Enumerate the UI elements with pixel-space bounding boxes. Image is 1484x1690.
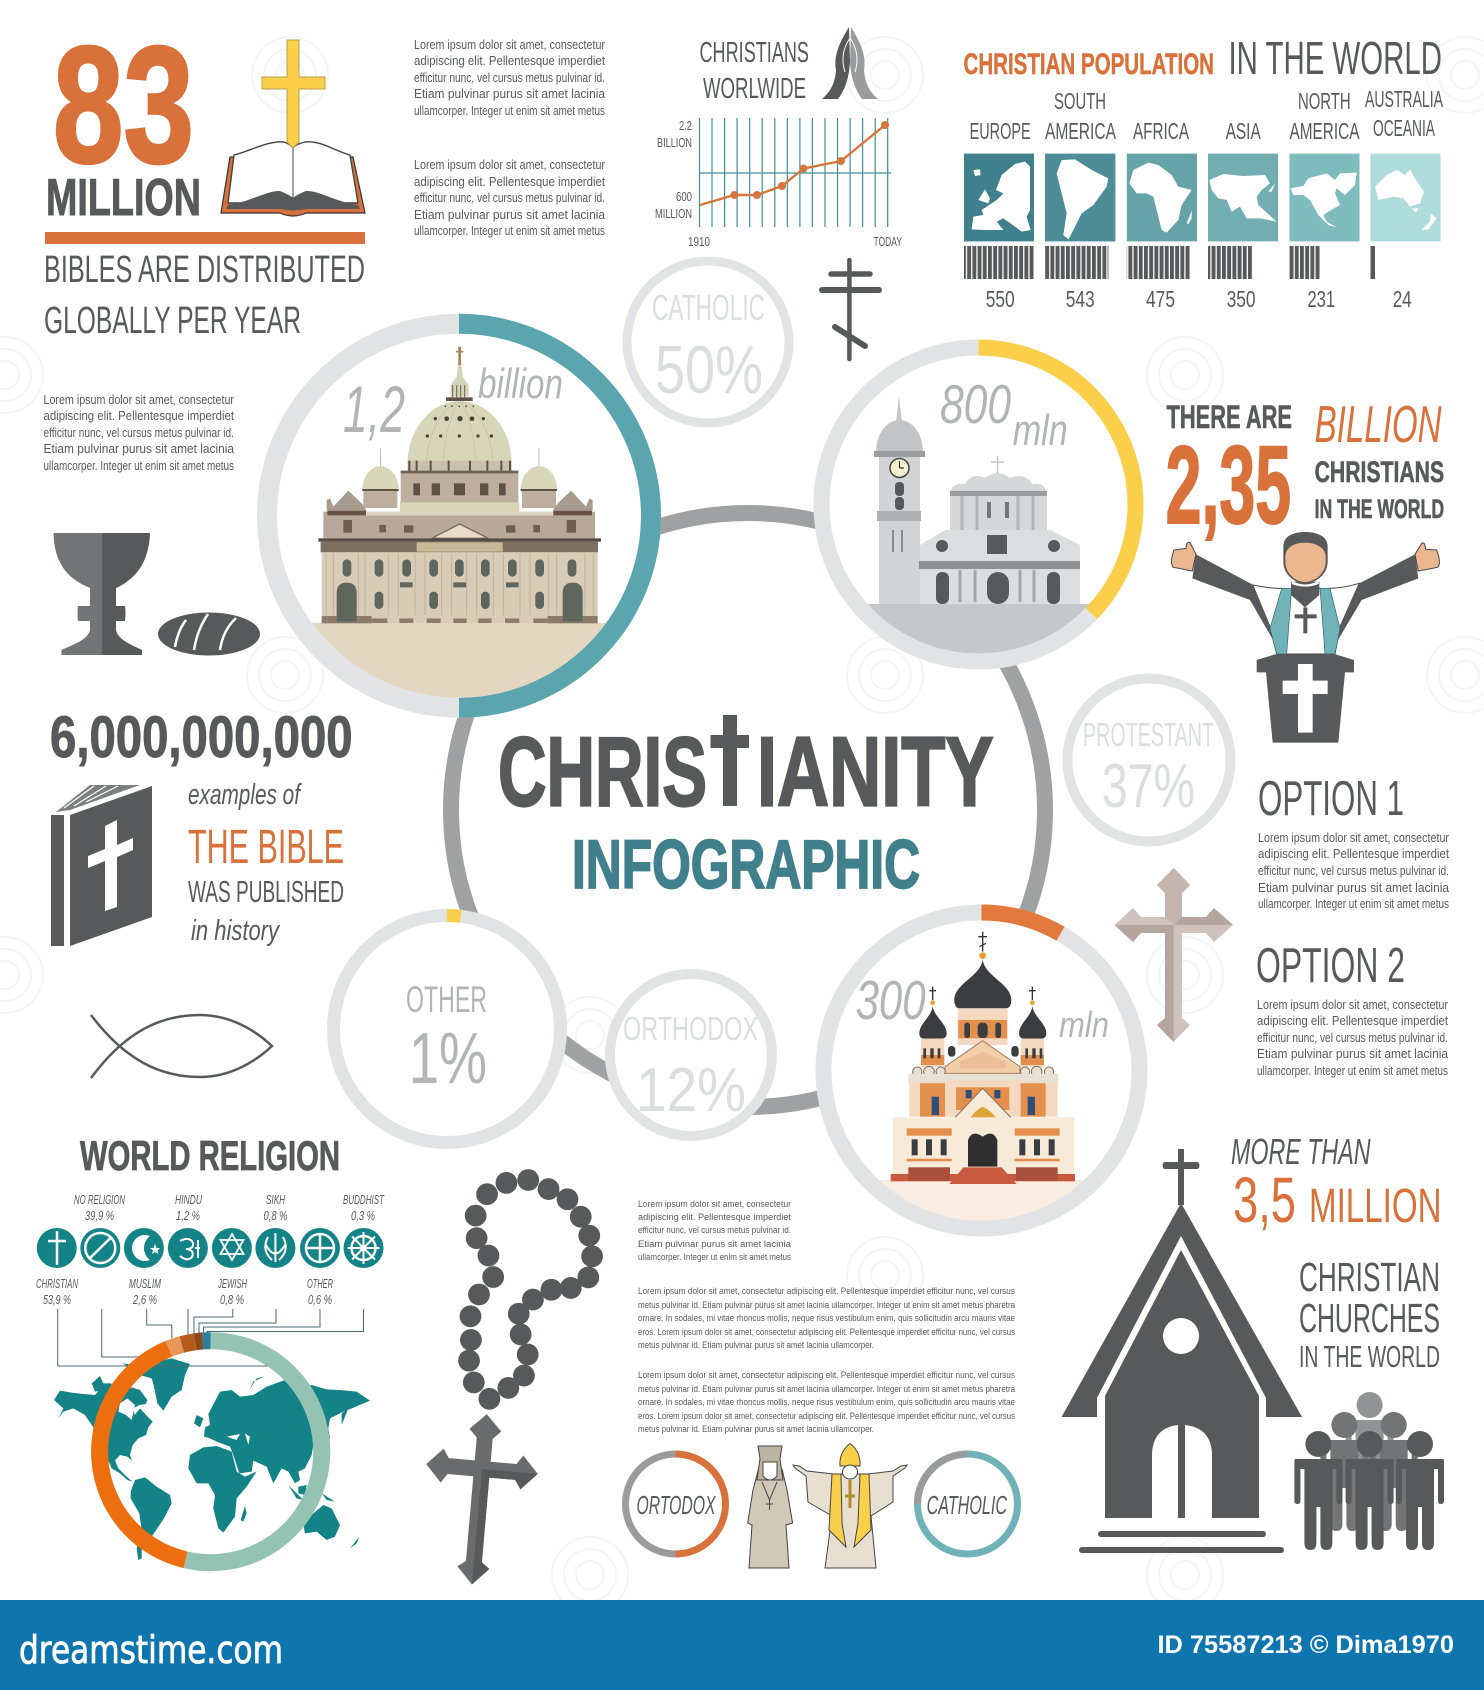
population values: 550 (986, 286, 1015, 312)
icon: orthodox cross (822, 260, 879, 359)
panel: protestant 37 percent: PROTESTANT (1083, 716, 1214, 753)
continent labels: AMERICA (1045, 118, 1116, 144)
heading: world religion: WORLD RELIGION (80, 1132, 340, 1179)
panel: catholic 50 percent: CATHOLIC (652, 287, 765, 328)
panel: catholic 50 percent: 50% (655, 332, 763, 408)
continent tiles (964, 154, 1034, 241)
icon: priest at pulpit (1171, 532, 1439, 743)
word MILLION: MILLION (46, 169, 201, 227)
axis labels: TODAY (874, 234, 902, 249)
text block: bottom wide 1: eros. Lorem ipsum dolor sit amet, consectetur adipiscing elit. Pellentesque imperdiet efficitur nunc, vel cursus (638, 1327, 1015, 1338)
icon: pope (793, 1444, 907, 1568)
panel: orthodox cathedral 300 mln (820, 912, 1140, 1240)
illustration: onion dome cathedral (891, 932, 1075, 1184)
panel: world religion chart (36, 1192, 385, 1563)
icon: orthodox priest (748, 1446, 793, 1568)
there are 2,35 billion christians (1166, 396, 1444, 547)
continent labels: ASIA (1226, 118, 1261, 144)
there are 2,35 billion christians: THERE ARE (1166, 399, 1292, 435)
continent labels: AMERICA (1290, 118, 1360, 144)
stole (1270, 588, 1292, 654)
text block: top 2: Lorem ipsum dolor sit amet, consectetur (414, 158, 605, 172)
text block: top 1: adipiscing elit. Pellentesque imperdiet (414, 54, 605, 68)
icon: church (1062, 1149, 1302, 1553)
icon: holy bible (51, 785, 152, 946)
progress arc (978, 348, 1136, 614)
head (1283, 532, 1328, 583)
population values: 475 (1146, 286, 1175, 312)
bottom labels: JEWISH (217, 1276, 247, 1291)
beads (458, 1169, 603, 1410)
panel: catholic basilica 1,2 billion: billion (478, 360, 563, 407)
text: examples of the bible: examples of (188, 779, 302, 811)
text block: bottom small: ullamcorper. Integer ut enim sit amet metus (638, 1252, 791, 1263)
text: examples of the bible (188, 779, 344, 947)
continent labels: AFRICA (1133, 118, 1189, 144)
option 1: Lorem ipsum dolor sit amet, consectetur (1258, 831, 1449, 845)
cross letter (710, 715, 749, 806)
bottom labels: CHRISTIAN (36, 1276, 78, 1291)
text block: bottom small: adipiscing elit. Pellentesque imperdiet (638, 1212, 791, 1223)
caption line 1: BIBLES ARE DISTRIBUTED (44, 249, 365, 291)
orange bar (45, 232, 365, 244)
chart grid (700, 118, 891, 227)
text block: bottom wide 2: ornare. In sodales, mi vitae rhoncus mollis, neque risus vestibulum enim, quis sollicitudin arcu mauris vitae (638, 1397, 1015, 1408)
option 2: adipiscing elit. Pellentesque imperdiet (1257, 1014, 1448, 1028)
axis labels: MILLION (655, 206, 692, 221)
ground (868, 604, 1089, 654)
option 1: adipiscing elit. Pellentesque imperdiet (1258, 847, 1449, 861)
option 1: OPTION 1 (1258, 772, 1404, 826)
population values: 24 (1393, 286, 1412, 312)
panel: orthodox 12 percent (610, 974, 772, 1136)
heading: christians worldwide: WORLWIDE (703, 73, 806, 105)
panel: christian population in the world (964, 32, 1443, 312)
panel: orthodox 12 percent: ORTHODOX (623, 1010, 758, 1047)
panel: other 1 percent: OTHER (406, 979, 487, 1020)
top labels: 0,8 % (264, 1208, 288, 1223)
text block: left: Etiam pulvinar purus sit amet lacinia (44, 442, 234, 456)
ground (880, 1180, 1084, 1220)
chalice icon (54, 533, 150, 655)
title second part: IANITY (757, 716, 994, 826)
text block: left: ullamcorper. Integer ut enim sit amet metus (44, 459, 234, 473)
option 1 (1258, 772, 1449, 911)
text: examples of the bible: WAS PUBLISHED (188, 874, 344, 909)
heading: christians worldwide: CHRISTIANS (700, 37, 809, 69)
population values (986, 286, 1412, 312)
continent labels: NORTH (1298, 88, 1351, 114)
world map (54, 1358, 370, 1560)
text block: top 1 (414, 38, 605, 118)
collar (1291, 582, 1319, 607)
heading: christians worldwide (700, 37, 809, 105)
top labels: 0,3 % (351, 1208, 375, 1223)
text block: top 1: efficitur nunc, vel cursus metus pulvinar id. (414, 71, 605, 85)
sleeves (1192, 554, 1275, 643)
ortodox badge (625, 1454, 725, 1554)
continent labels: OCEANIA (1373, 115, 1435, 141)
number 83: 83 (53, 13, 194, 198)
text block: left: efficitur nunc, vel cursus metus pulvinar id. (44, 426, 234, 440)
ground (312, 623, 606, 698)
heading: CHRISTIAN POPULATION (964, 48, 1214, 81)
data points (730, 121, 889, 199)
connector ring (451, 513, 1045, 1107)
value: 1,2 (343, 372, 405, 446)
text block: bottom wide 1: metus pulvinar id. Etiam pulvinar purus sit amet lacinia ullamcorper. (638, 1340, 874, 1351)
axis labels (655, 118, 902, 249)
text block: bottom wide 2 (638, 1370, 1016, 1435)
text block: top 2: efficitur nunc, vel cursus metus pulvinar id. (414, 191, 605, 205)
text block: bottom wide 1: Lorem ipsum dolor sit amet, consectetur adipiscing elit. Pellentesque imperdiet efficitur nunc, vel cursus (638, 1286, 1015, 1297)
catholic badge (918, 1454, 1018, 1554)
pulpit (1257, 654, 1354, 743)
bottom labels: 0,6 % (308, 1292, 332, 1307)
there are 2,35 billion christians: 2,35 (1166, 424, 1291, 547)
panel: catholic basilica 1,2 billion (267, 324, 651, 713)
bottom labels: MUSLIM (129, 1276, 161, 1291)
panel: catholic 50 percent (627, 261, 789, 423)
text block: bottom small: Lorem ipsum dolor sit amet, consectetur (638, 1199, 792, 1210)
continent labels (970, 86, 1443, 144)
icon: open bible with golden cross (221, 40, 365, 216)
caption line 2: GLOBALLY PER YEAR (44, 300, 301, 342)
text block: bottom wide 2: metus pulvinar id. Etiam pulvinar purus sit amet lacinia ullamcorper. Integer ut enim sit amet metus pharetra (638, 1384, 1016, 1395)
text: more than 3,5 million churches: 3,5 (1233, 1164, 1296, 1236)
axis labels: BILLION (657, 135, 692, 150)
text: more than 3,5 million churches: MORE THAN (1231, 1131, 1371, 1172)
axis labels: 600 (676, 189, 692, 204)
population values: 350 (1227, 286, 1256, 312)
panel: protestant church 800 mln: mln (1013, 406, 1068, 455)
text block: bottom small: efficitur nunc, vel cursus metus pulvinar id. (638, 1225, 791, 1236)
value: 300 (856, 969, 926, 1031)
text block: top 1: Lorem ipsum dolor sit amet, consectetur (414, 38, 605, 52)
top labels: HINDU (175, 1192, 202, 1207)
hands (1171, 542, 1196, 571)
line chart: christians 1910 to today (655, 118, 902, 249)
text block: bottom wide 2: Lorem ipsum dolor sit amet, consectetur adipiscing elit. Pellentesque imperdiet efficitur nunc, vel cursus (638, 1370, 1015, 1381)
shirt (1253, 583, 1359, 654)
crucifix (416, 1409, 543, 1589)
leader lines (58, 1309, 363, 1366)
text block: top 2 (414, 158, 605, 238)
text block: bottom wide 1: ornare. In sodales, mi vitae rhoncus mollis, neque risus vestibulum enim, quis sollicitudin arcu mauris vitae (638, 1313, 1015, 1324)
option 2: Etiam pulvinar purus sit amet lacinia (1257, 1047, 1448, 1061)
top labels: NO RELIGION (74, 1192, 125, 1207)
value: 800 (940, 373, 1011, 435)
text block: bottom small (638, 1199, 792, 1263)
continent labels: EUROPE (970, 118, 1031, 144)
panel: protestant 37 percent (1068, 678, 1230, 842)
religion symbols (37, 1228, 384, 1268)
option 2: OPTION 2 (1256, 939, 1405, 993)
text block: left: Lorem ipsum dolor sit amet, consectetur (44, 393, 234, 407)
text block: bottom small: Etiam pulvinar purus sit amet lacinia (638, 1239, 792, 1250)
panel: other 1 percent (334, 915, 560, 1142)
population values: 231 (1308, 286, 1335, 312)
population bars (964, 246, 1034, 279)
top labels: 1,2 % (176, 1208, 200, 1223)
panel: other 1 percent: 1% (409, 1019, 487, 1099)
text block: top 1: Etiam pulvinar purus sit amet lacinia (414, 87, 605, 101)
bottom labels (36, 1276, 333, 1307)
text: more than 3,5 million churches (1231, 1131, 1442, 1374)
text block: bottom wide 2: metus pulvinar id. Etiam pulvinar purus sit amet lacinia ullamcorper. (638, 1424, 874, 1435)
catholic badge: CATHOLIC (927, 1490, 1007, 1520)
illustration: church with clock tower (874, 396, 1080, 604)
bottom labels: OTHER (307, 1276, 333, 1291)
panel: protestant 37 percent: 37% (1102, 752, 1195, 821)
top labels (74, 1192, 385, 1223)
top labels: SIKH (266, 1192, 285, 1207)
top labels: BUDDHIST (343, 1192, 385, 1207)
title first part: CHRIS (498, 716, 707, 826)
bottom labels: 2,6 % (132, 1292, 157, 1307)
text block: bottom wide 2: eros. Lorem ipsum dolor sit amet, consectetur adipiscing elit. Pellentesque imperdiet efficitur nunc, vel cursus (638, 1411, 1015, 1422)
text block: bottom wide 1 (638, 1286, 1016, 1351)
image id: ID 75587213 © Dima1970 (1158, 1631, 1454, 1659)
top labels: 39,9 % (85, 1208, 114, 1223)
bread icon (158, 612, 260, 656)
data line (700, 125, 885, 205)
text block: left (44, 393, 234, 473)
text: examples of the bible: THE BIBLE (188, 821, 344, 874)
text block: top 1: ullamcorper. Integer ut enim sit amet metus (414, 104, 605, 118)
text block: left: adipiscing elit. Pellentesque imperdiet (44, 409, 234, 423)
icon: rosary (416, 1169, 603, 1589)
continent silhouettes (972, 159, 1437, 239)
title: christianity infographic (498, 715, 994, 903)
axis labels: 1910 (688, 234, 710, 249)
population values: 543 (1066, 286, 1095, 312)
icon: group of people (1294, 1392, 1444, 1550)
number: 6,000,000,000: 6,000,000,000 (50, 705, 353, 770)
bottom labels: 53,9 % (43, 1292, 71, 1307)
text: examples of the bible: in history (191, 915, 280, 947)
panel: orthodox 12 percent: 12% (636, 1056, 746, 1125)
icon: decorative latin cross (1114, 868, 1233, 1042)
text block: bottom wide 1: metus pulvinar id. Etiam pulvinar purus sit amet lacinia ullamcorper. Integer ut enim sit amet metus pharetra (638, 1300, 1016, 1311)
subtitle: INFOGRAPHIC (572, 826, 920, 903)
icon: praying hands (822, 27, 878, 99)
panel: protestant church 800 mln (820, 348, 1140, 674)
option 2 (1256, 939, 1448, 1078)
text block: top 2: Etiam pulvinar purus sit amet lacinia (414, 208, 605, 222)
bottom labels: 0,8 % (220, 1292, 244, 1307)
option 1: Etiam pulvinar purus sit amet lacinia (1258, 881, 1449, 895)
footer bar (0, 1600, 1484, 1690)
icon: ichthys fish (91, 1015, 272, 1078)
panel: orthodox cathedral 300 mln: mln (1059, 1004, 1109, 1045)
continent labels: SOUTH (1054, 88, 1106, 114)
text block: top 2: ullamcorper. Integer ut enim sit amet metus (414, 224, 605, 238)
progress arc (459, 324, 651, 708)
ortodox badge: ORTODOX (636, 1490, 716, 1520)
illustration: st peter's basilica (318, 347, 601, 623)
brand logo text: dreamstime.com (19, 1628, 283, 1672)
axis labels: 2.2 (679, 118, 692, 133)
text block: top 2: adipiscing elit. Pellentesque imperdiet (414, 175, 605, 189)
option 2: Lorem ipsum dolor sit amet, consectetur (1257, 998, 1448, 1012)
donut chart (100, 1341, 322, 1563)
headline: 83 million bibles (44, 13, 365, 342)
progress arc (982, 912, 1060, 934)
